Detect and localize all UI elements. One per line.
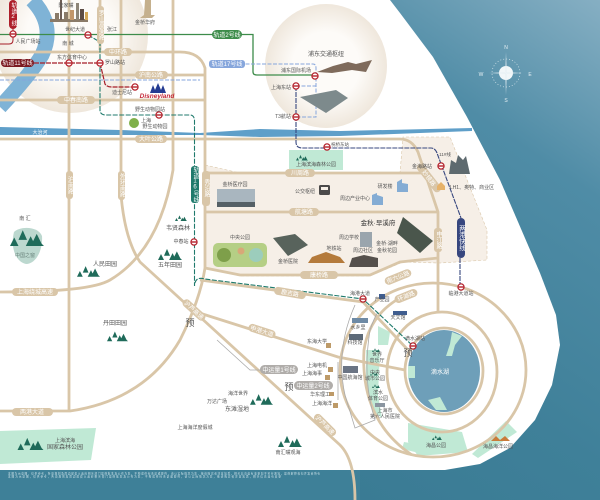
pill: line 11: 轨道11号线 xyxy=(2,59,33,67)
line: navy dashed xyxy=(296,86,461,287)
road: lake ring inner xyxy=(405,328,483,414)
pill: gray 1: 中运量1号线 xyxy=(262,366,296,374)
landmark: wildlife park icon xyxy=(129,118,139,128)
map labels: 华东理工 xyxy=(310,391,330,398)
pill: road 8: 上海绕城高速 xyxy=(17,288,53,296)
map labels: 世界 xyxy=(372,351,382,358)
map labels: 水乡里 xyxy=(350,324,366,331)
map labels: 上海滨海 xyxy=(55,437,75,444)
map labels: 公交枢纽 xyxy=(295,188,315,195)
pill: road 7: 外环南路 xyxy=(118,172,126,198)
southwest lake xyxy=(13,228,42,264)
map labels: 南 城 xyxy=(62,40,74,47)
map labels: 中央 xyxy=(370,369,380,376)
map labels xyxy=(15,2,513,456)
pill: road 3: 康桥路 xyxy=(310,271,328,279)
map labels: 大治河 xyxy=(32,129,48,136)
pill: road 6 xyxy=(66,171,74,199)
road: lake ring mid xyxy=(387,312,497,432)
icon: east orange building xyxy=(437,182,445,190)
map labels: 东方体育中心 xyxy=(57,54,87,61)
landmark gate icons xyxy=(185,318,413,392)
map labels: 上海市 xyxy=(377,407,393,414)
pill: road 14: 环湖路 xyxy=(396,289,416,303)
small Lingang buildings xyxy=(325,294,510,441)
map labels: 金桥华府 xyxy=(135,19,155,26)
map labels: 中央公园 xyxy=(230,234,250,241)
map labels: 海昌公园 xyxy=(426,442,446,449)
compass: W xyxy=(479,72,484,78)
landmark gate icons: 预 xyxy=(185,318,195,328)
lake: Dishui xyxy=(408,330,480,412)
pill: express line: 两港快线 xyxy=(458,225,466,251)
disclaimer text xyxy=(8,472,320,478)
pill: road 7 xyxy=(118,171,126,200)
map labels: 中国航海馆 xyxy=(337,374,363,381)
map labels: 五年田园 xyxy=(158,261,182,269)
pill: road 15 xyxy=(312,412,338,438)
map labels: 国家森林公园 xyxy=(47,443,83,451)
map labels: 浦东国际机场 xyxy=(281,67,311,74)
pill: road 4: 秀沿路 xyxy=(203,178,210,198)
pill: vertical road xyxy=(97,6,104,44)
park: ring band west xyxy=(366,350,382,418)
pill: road 12 xyxy=(274,286,306,300)
landmark: metro museum xyxy=(308,252,345,263)
pill: road 2: 航塘路 xyxy=(295,208,313,216)
compass: N xyxy=(504,45,508,51)
pill: road 15: 沪芦高速 xyxy=(314,414,336,436)
map labels: 海港大道 xyxy=(350,290,370,297)
landmark: residences xyxy=(349,255,378,267)
landmark: Disneyland: Disneyland xyxy=(140,93,175,100)
map labels: 金秋·早溪府 xyxy=(361,218,396,227)
landmark: Jinqiao Zaoxi project xyxy=(397,217,433,253)
compass: E xyxy=(528,72,532,78)
park: ring south small xyxy=(402,442,416,452)
pill: Daye road: 大叶公路 xyxy=(139,135,163,143)
pill: gray 1 xyxy=(260,365,298,374)
landmark: school xyxy=(360,232,372,247)
pill: road 9 xyxy=(12,408,53,416)
line: green xyxy=(0,34,315,75)
park: bottom left forest xyxy=(0,428,96,464)
map labels: 祝桥东站 xyxy=(331,141,349,148)
park: lake shore north xyxy=(378,326,390,345)
pill: road 11 xyxy=(384,268,413,286)
map labels: 滨水 xyxy=(373,389,383,396)
map labels: 韦贤森林 xyxy=(166,224,190,232)
map labels: 南 汇 xyxy=(19,215,31,222)
road name pills xyxy=(12,6,443,438)
pill: Zhonghuan xyxy=(104,48,132,56)
map labels: 研发楼 xyxy=(377,183,393,190)
pill: Daye road xyxy=(135,135,167,143)
map labels: 音乐厅 xyxy=(369,357,385,364)
pill: line 11 xyxy=(1,59,34,67)
road: outer ring xyxy=(340,283,526,457)
pill: green line xyxy=(212,30,242,39)
map labels: 丹田田园 xyxy=(103,320,127,327)
map labels: 地铁站 xyxy=(326,245,342,252)
map labels: 南汇嘴观海 xyxy=(275,449,301,456)
map labels: LH1、奥特、商业区 xyxy=(450,184,494,191)
pill: road 10: 妙镜路 xyxy=(420,169,438,188)
pill: teal line: 轨道16号线 xyxy=(192,166,199,203)
map labels: 11#线 xyxy=(439,151,451,157)
pill: road 8 xyxy=(12,288,58,296)
disclaimer text: 本图为示意图，仅供参考，各项规划及周边配套以政府相关部门最终批准及公布为准，不构成任何承诺或要约，请以实际情况为准，敬请购房者注意知悉，相关信息如有变更 xyxy=(8,474,281,478)
line: red top left xyxy=(0,28,13,44)
map labels: 上海滨海森林公园 xyxy=(296,161,336,168)
map labels: 临港大道站 xyxy=(448,290,474,297)
river: Huangpu curve xyxy=(0,0,47,107)
pill: S2 xyxy=(181,298,207,322)
map labels: 周边学校 xyxy=(339,234,359,241)
panel: Hongqiao disc xyxy=(265,4,387,128)
line: light blue dashed xyxy=(0,64,316,117)
map labels: 罗山路站 xyxy=(105,59,125,66)
compass: S xyxy=(504,98,508,104)
pill: red vertical xyxy=(9,0,17,29)
pill: road 5 xyxy=(434,228,442,252)
map labels: 金桥医疗园 xyxy=(222,181,248,188)
map labels: 上海 xyxy=(141,117,151,124)
map labels: 海昌海洋公园 xyxy=(483,443,513,450)
parks xyxy=(0,150,517,464)
sea wave shading xyxy=(0,470,360,500)
map labels: 海洋世界 xyxy=(228,390,248,397)
map labels: 城市公园 xyxy=(365,375,385,382)
map labels: 科技馆 xyxy=(347,339,363,346)
transit lines xyxy=(0,28,461,346)
pill: gray 2 xyxy=(294,381,333,390)
pill: road 1 xyxy=(285,169,315,177)
map labels: 中国之窗 xyxy=(15,252,35,259)
forest tree icons xyxy=(10,155,442,450)
pill: road 13: 申港大道 xyxy=(249,324,275,339)
pill: gray 2: 中运量2号线 xyxy=(296,382,330,390)
map labels: 上海海事 xyxy=(302,370,322,377)
pill: blue line xyxy=(209,60,245,68)
map labels: 上海电机 xyxy=(307,362,327,369)
map labels: 第六人民医院 xyxy=(370,413,400,420)
landmark: Jinqiao Hospital xyxy=(217,189,255,207)
landmark: Jinhai building xyxy=(449,155,470,174)
landmark: Hongqiao station wing xyxy=(317,60,372,73)
panel: Puxi disc xyxy=(0,0,148,113)
map labels: 野生动物园站 xyxy=(135,106,165,113)
pill: Zhongchun road xyxy=(57,96,95,104)
pill: road 11: 南六公路 xyxy=(385,269,411,285)
panel: central district block xyxy=(205,137,487,276)
road: gray service loop xyxy=(342,305,378,428)
map labels: 人民广场站 xyxy=(15,38,41,45)
pill: Hunan road xyxy=(135,71,168,79)
landmark: Disneyland xyxy=(140,83,175,100)
landmark gate icons: 预 xyxy=(284,382,294,392)
landmark: Jinrong park xyxy=(273,234,308,256)
map labels: 万达广场 xyxy=(207,398,227,405)
map labels: 东海大学 xyxy=(307,338,327,345)
park: ring band south xyxy=(408,423,468,456)
landmark: Jinqiao tower xyxy=(140,0,155,18)
map labels: 陆家嘴 xyxy=(58,2,74,9)
icon: blue office 1 xyxy=(397,179,408,192)
metro stations xyxy=(10,31,464,349)
pill: road 4 xyxy=(202,171,210,206)
pill: road 2 xyxy=(289,208,319,216)
pill: blue line: 轨道17号线 xyxy=(212,60,242,68)
map labels: 人民田园 xyxy=(93,261,117,268)
pill: vertical road: 罗山高架路 xyxy=(98,10,104,41)
pill: road 5: 申江路 xyxy=(435,230,442,250)
map labels: 张江 xyxy=(107,26,117,33)
map labels: 金桥·湖畔 xyxy=(376,240,398,247)
map labels: 金桥医院 xyxy=(278,258,298,265)
pill: road 3 xyxy=(300,271,338,279)
map labels: 周边产业中心 xyxy=(340,195,370,202)
pill: road 10 xyxy=(415,162,443,194)
line pills xyxy=(1,0,466,258)
map labels: 产业园 xyxy=(374,296,390,303)
pill: road 14 xyxy=(393,288,419,304)
map labels: 世纪大道 xyxy=(65,26,85,33)
map labels: 迪士尼站 xyxy=(112,89,132,96)
pill: road 13 xyxy=(247,323,277,339)
disclaimer text: 本图为示意图，仅供参考，各项规划及周边配套以政府相关部门最终批准及公布为准，不构成任何承诺或要约，请以实际情况为准，敬请购房者注意知悉，相关信息如有变更恕不另行通知，最终解释权归开发商所有 xyxy=(8,472,320,476)
park: top green xyxy=(289,150,343,170)
map labels: 野生动物园 xyxy=(142,123,168,130)
pill: green line: 轨道2号线 xyxy=(213,31,241,39)
landmark: Lujiazui skyline xyxy=(50,0,88,22)
pill: road 12: 鹿吉路 xyxy=(280,288,300,299)
icon: blue office 2 xyxy=(372,193,383,205)
pill: road 1: 川周路 xyxy=(291,169,309,177)
river: Dazhi xyxy=(0,127,472,137)
pill: Zhonghuan: 中环路 xyxy=(109,48,127,56)
map labels: 体育公园 xyxy=(368,395,388,402)
pill: express line xyxy=(457,218,466,258)
pill: red vertical: 轨道2线 xyxy=(10,1,17,26)
pill: S2: 沪芦高速 xyxy=(182,299,205,321)
icon: bus xyxy=(319,185,330,195)
map labels: 中春站 xyxy=(173,238,189,245)
pill: road 6: 沪南路 xyxy=(66,175,74,195)
map labels: 天文馆 xyxy=(390,314,406,321)
map labels: T3航站 xyxy=(275,113,291,120)
pill: Hunan road: 沪南公路 xyxy=(139,71,163,79)
map labels: 东滩湿地 xyxy=(225,405,249,413)
pill: road 9: 两港大道 xyxy=(20,408,44,416)
map labels: 金秋花园 xyxy=(377,247,397,254)
landmark: Hongqiao airport xyxy=(300,90,348,113)
map labels: 浦东交通枢纽 xyxy=(308,50,344,58)
central park xyxy=(213,243,267,267)
lake: Dishui: 滴水湖 xyxy=(431,368,449,376)
park: Haichang xyxy=(472,421,517,458)
map labels: 金海路站 xyxy=(412,163,432,170)
line: red dashed xyxy=(34,63,135,87)
line: teal dashed xyxy=(88,35,413,346)
map labels: 上海海洋度假城 xyxy=(177,424,213,431)
pill: Zhongchun road: 中春南路 xyxy=(64,96,88,104)
map labels: 滴水湖站 xyxy=(405,335,425,342)
map labels: 上海东站 xyxy=(271,84,291,91)
map labels: 上海海洋 xyxy=(312,400,332,407)
landmark gate icons: 预 xyxy=(403,348,413,358)
map labels: 周边社区 xyxy=(353,247,373,254)
compass xyxy=(479,45,532,104)
